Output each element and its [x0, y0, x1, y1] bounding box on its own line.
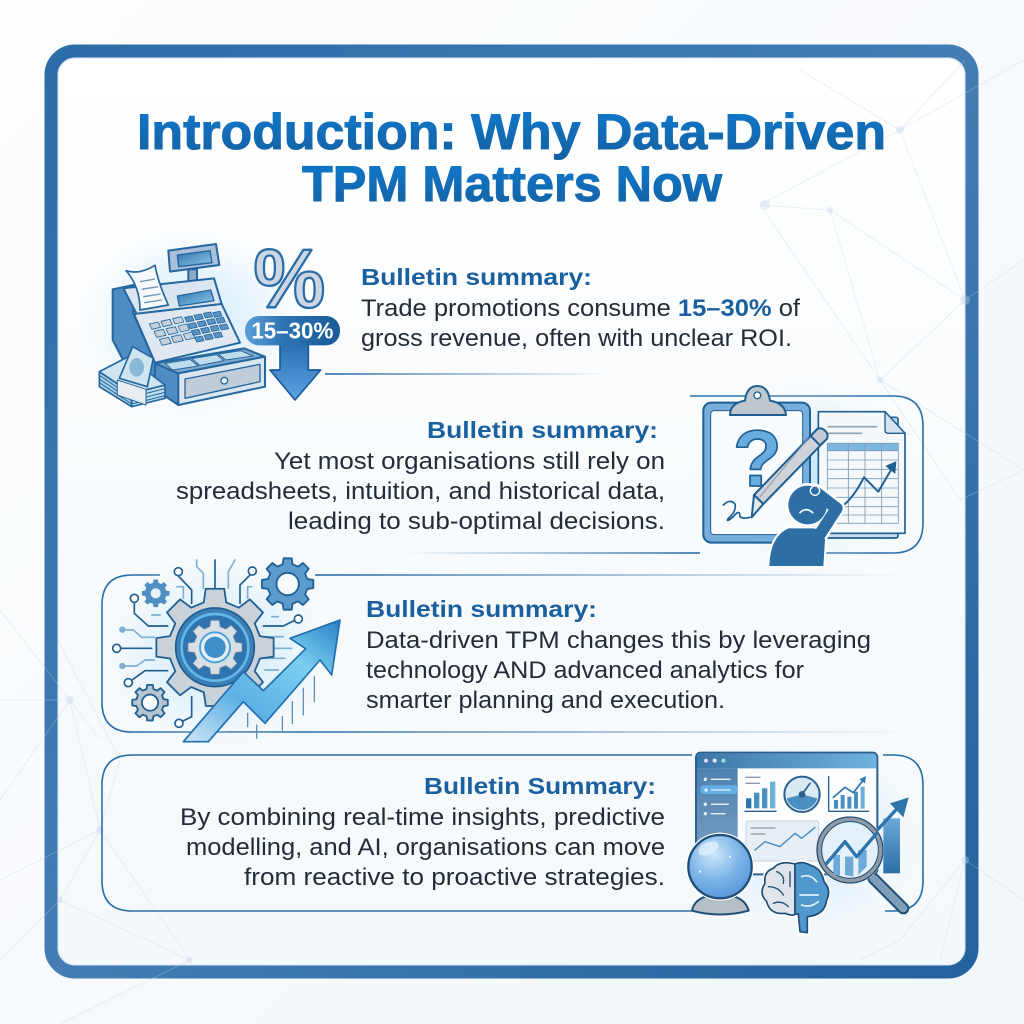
text block: row 1: Bulletin summary:	[361, 264, 592, 290]
icon: small gear bottom left	[132, 685, 168, 720]
icon: small gear top left	[142, 580, 169, 607]
icon: confused person	[769, 485, 837, 566]
title	[137, 104, 886, 212]
text block: row 1	[361, 264, 800, 352]
chart: growth chart	[829, 776, 869, 811]
icon: dashboard window	[696, 753, 877, 874]
icon: big gear	[156, 589, 274, 706]
text block: row 1: Trade promotions consume 15–30% of	[361, 295, 800, 322]
panel: row 2 outline	[405, 396, 923, 554]
text block: row 4: from reactive to proactive strategies.	[244, 864, 665, 891]
icon: circuit lines	[113, 560, 314, 738]
icon: clipboard, spreadsheet and confused person	[688, 378, 922, 572]
icon: register body	[113, 278, 240, 387]
icon: growth arrow and bar	[877, 797, 909, 873]
icon: crystal ball	[686, 833, 754, 914]
icon: cash register with percent drop	[77, 227, 340, 420]
text block: row 3: Data-driven TPM changes this by leveraging	[366, 627, 871, 654]
icon: keypads	[149, 311, 229, 345]
icon: dashboard, crystal ball, brain and magnifier	[680, 737, 927, 937]
text block: row 2	[176, 417, 665, 535]
panel: row 1 underline	[325, 373, 610, 375]
icon: gears, circuit and rising arrow	[98, 553, 340, 753]
icon: small gear top right	[262, 558, 313, 610]
panel: row 4 outline	[102, 755, 923, 911]
icon: rising arrow	[183, 620, 340, 742]
panel: row 3 outline	[102, 574, 910, 733]
badge: 15-30%: 15–30%	[251, 318, 334, 344]
chart: bar chart	[745, 777, 776, 811]
text block: row 3: technology AND advanced analytics for	[366, 657, 804, 684]
text block: row 3	[366, 596, 871, 714]
text block: row 4	[180, 773, 665, 891]
text block: row 2: leading to sub-optimal decisions.	[288, 508, 665, 535]
text block: row 3: Bulletin summary:	[366, 596, 597, 622]
icon: receipt	[126, 265, 168, 310]
text block: row 4: modelling, and AI, organisations can move	[186, 834, 665, 861]
title: TPM Matters Now	[302, 156, 722, 212]
text block: row 4: By combining real-time insights, predictive	[180, 804, 665, 831]
text block: row 2: spreadsheets, intuition, and historical data,	[176, 478, 665, 505]
icon: spreadsheet	[818, 412, 905, 538]
icon: brain	[762, 863, 829, 933]
text block: row 2: Yet most organisations still rely on	[274, 448, 665, 475]
text block: row 4: Bulletin Summary:	[424, 773, 656, 799]
chart: line panel	[746, 821, 819, 861]
icon: pencil	[752, 428, 828, 517]
chart: gauge	[784, 777, 820, 812]
icon: magnifier	[816, 816, 903, 908]
icon: down arrow	[270, 343, 321, 400]
icon: clipboard	[703, 386, 810, 543]
icon: money stack	[99, 347, 165, 407]
icon: cash drawer	[155, 348, 265, 405]
text block: row 2: Bulletin summary:	[427, 417, 658, 443]
icon: signature	[723, 501, 750, 520]
icon: pole display	[168, 244, 219, 283]
title: Introduction: Why Data-Driven	[137, 104, 886, 160]
icon: percent sign: %	[253, 232, 325, 325]
text block: row 1: gross revenue, often with unclear ROI.	[361, 325, 792, 352]
text block: row 3: smarter planning and execution.	[366, 687, 725, 714]
icon: question mark: ?	[733, 414, 782, 503]
